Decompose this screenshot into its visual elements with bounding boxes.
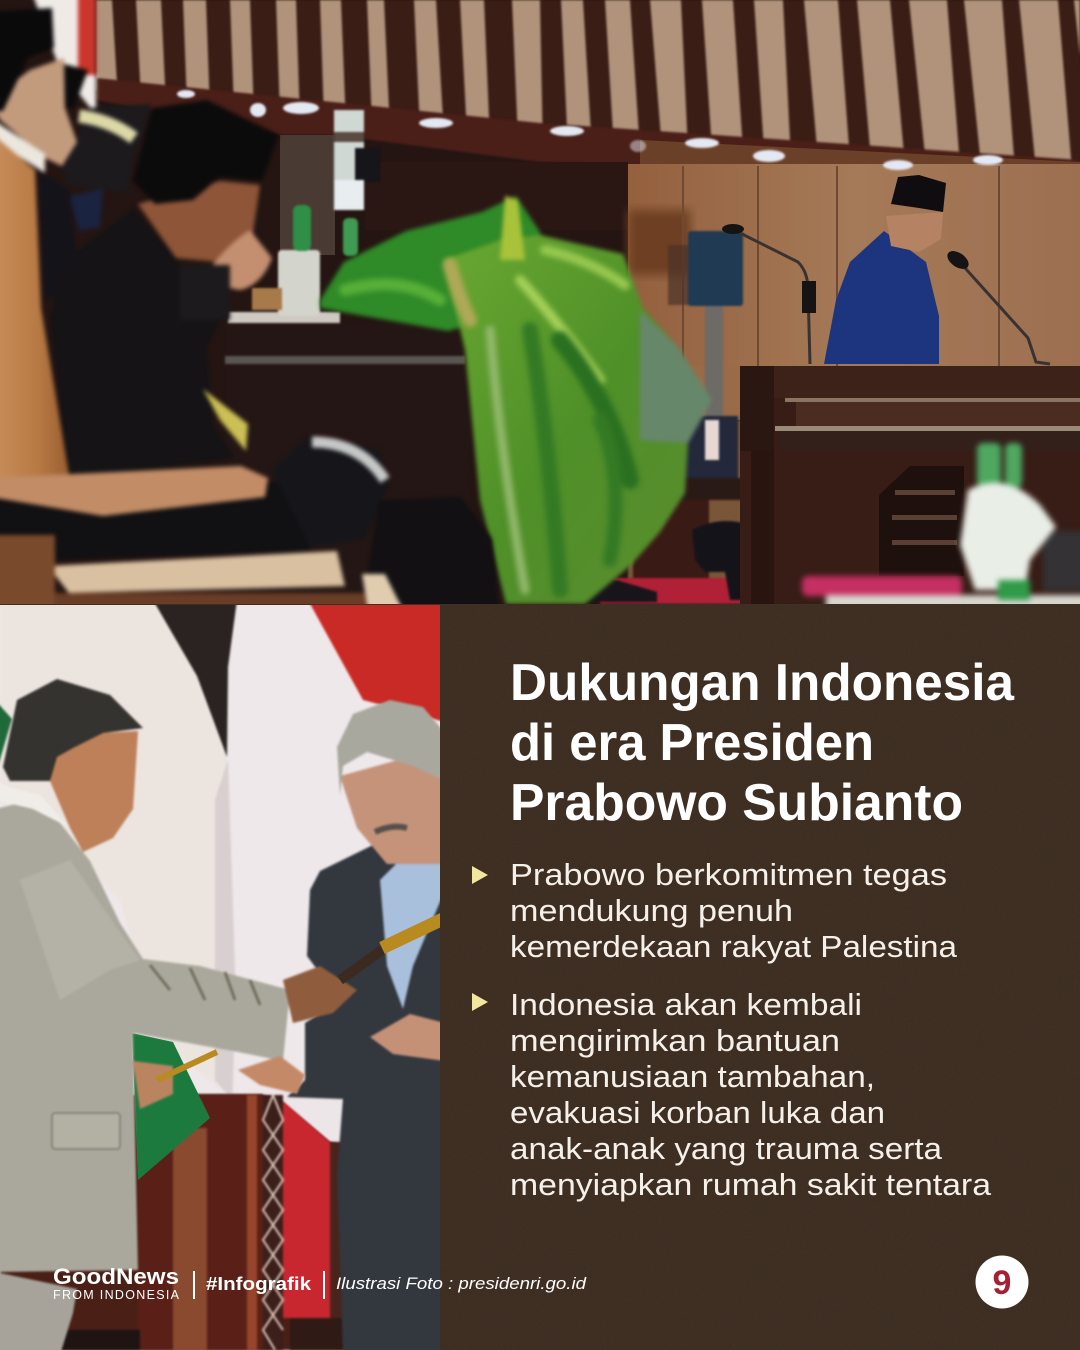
bullet list 1: mendukung penuh [510,893,793,928]
ceiling slats [96,0,1080,175]
man on left in gray suit [0,679,357,1350]
bullet list 2: menyiapkan rumah sakit tentara [510,1167,992,1202]
logo: GoodNews from Indonesia: FROM INDONESIA [53,1288,180,1302]
camera and lap [0,480,310,560]
photo credit: Ilustrasi Foto : presidenri.go.id [336,1275,587,1293]
bullet list 1 [472,857,958,964]
logo: GoodNews from Indonesia: GoodNews [53,1264,179,1289]
main man body [50,208,234,480]
page number badge [976,1256,1028,1308]
hashtag: #Infografik [206,1274,312,1294]
Palestinian flags backdrop [0,600,445,1350]
green plant [320,196,712,604]
woman with flower headdress [62,104,152,193]
ceiling beam [96,78,1080,168]
bullet list 1: kemerdekaan rakyat Palestina [510,929,958,964]
brown panel [440,605,1080,1350]
photo: president speaking in parliament [0,0,1080,615]
bullet list 2 [472,987,992,1202]
window and camera [334,110,380,210]
foreground seated officials [0,0,499,615]
heading: Dukungan Indonesia [510,654,1015,712]
bullet list 2: Indonesia akan kembali [510,987,862,1022]
bullet list 2: kemanusiaan tambahan, [510,1059,875,1094]
page number badge: 9 [993,1264,1011,1302]
brown robe [0,132,69,480]
heading: di era Presiden [510,714,874,772]
first man cap [0,8,54,111]
podium [740,366,1080,604]
icon: bullet arrow [472,993,488,1011]
man on right [287,700,445,1350]
icon: bullet arrow [472,866,488,884]
chair [48,551,345,593]
second man skin and cap [0,58,77,166]
speaker figure [824,175,946,364]
heading [510,654,1015,832]
ceiling lights [177,90,1003,170]
upper back walls [280,135,1080,420]
heading: Prabowo Subianto [510,774,963,832]
foreground bottle decoration [802,443,1080,609]
microphones [738,232,1050,364]
carved wood panel [60,1094,345,1350]
hands [200,230,272,290]
bullet list 2: mengirimkan bantuan [510,1023,840,1058]
photo: handover of keris to Palestinian prime minister [0,600,445,1350]
green flag piece [132,1033,210,1180]
keris [157,918,445,1080]
bullet list 2: anak-anak yang trauma serta [510,1131,943,1166]
bullet list 1: Prabowo berkomitmen tegas [510,857,947,892]
footer: credits [53,1264,587,1302]
logo: GoodNews from Indonesia [53,1264,180,1302]
black suit behind [38,172,76,298]
table with glasses [224,204,466,366]
speaker box and stand [668,231,743,418]
background furniture and carpet [592,414,740,604]
bullet list 2: evakuasi korban luka dan [510,1095,885,1130]
